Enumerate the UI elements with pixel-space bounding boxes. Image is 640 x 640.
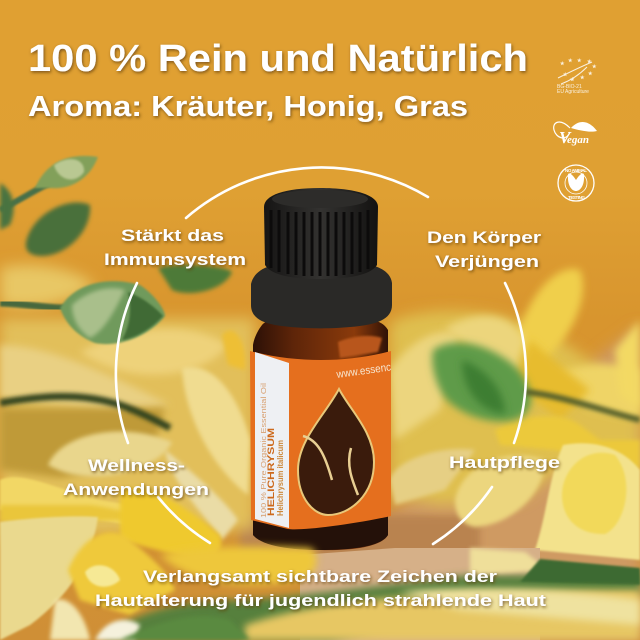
bottom caption: Hautalterung für jugendlich strahlende Haut [95, 591, 546, 610]
icon: EU organic leaf badge: ★ [577, 58, 582, 64]
benefit label: wellness: Anwendungen [63, 480, 209, 499]
title: 100 % Rein und Natürlich [28, 38, 528, 80]
benefit label: wellness [63, 456, 209, 499]
bottle: amber highlight [338, 336, 382, 358]
benefit label: immune system: Immunsystem [104, 250, 246, 269]
bottle: white side panel of label: Helichrysum italicum [276, 440, 285, 516]
icon: vegan leaf badge [554, 122, 597, 147]
icon: no animal testing badge: TESTING [568, 195, 585, 200]
icon: no animal testing badge: NO ANIMAL [565, 168, 587, 173]
large green bud: left [0, 281, 165, 344]
petals on the right [390, 269, 640, 560]
bottle: white side panel of label [255, 352, 289, 528]
green bud: right [432, 343, 640, 421]
icon: EU organic leaf badge: ★ [592, 64, 597, 70]
benefit label: rejuvenate [427, 228, 541, 271]
blurred bud behind label text [158, 265, 232, 293]
benefit label: skin care: Hautpflege [449, 453, 560, 472]
title [28, 38, 528, 123]
icon: vegan leaf badge: V [559, 128, 572, 147]
subtitle: aroma: Aroma: Kräuter, Honig, Gras [28, 91, 468, 123]
wooden table surface [240, 325, 640, 640]
icon: drop emblem on label [298, 389, 374, 515]
bottle: ribbed screw cap [264, 188, 378, 279]
icon: EU organic leaf badge: EU Agriculture [557, 89, 589, 95]
wood table foreground edge [300, 548, 540, 640]
bottle: white side panel of label: 100 % Pure Organic Essential Oil [261, 382, 268, 518]
bottom caption [95, 567, 546, 610]
icon: no animal testing badge [558, 165, 594, 201]
icon: EU organic leaf badge: ★ [588, 71, 593, 77]
bottle: white side panel of label: HELICHRYSUM [266, 428, 277, 516]
icon: EU organic leaf badge: ★ [568, 58, 573, 64]
icon: vegan leaf badge: egan [567, 134, 589, 146]
icon: EU organic leaf badge: BG-BIO-21 [557, 84, 582, 90]
dark stem across the left petals [0, 396, 170, 428]
bottle: label website text: www.essenc [335, 361, 392, 381]
bottom caption: Verlangsamt sichtbare Zeichen der [143, 567, 497, 586]
icon: EU organic leaf badge: ★ [560, 61, 565, 67]
circular arc segments around the bottle [116, 167, 526, 544]
blurred petals behind the bottle: left mass [0, 265, 255, 540]
benefit label: rejuvenate: Den Körper [427, 228, 541, 247]
icon: EU organic leaf badge: ★ [580, 75, 585, 81]
icon: EU organic leaf badge: ★ [563, 72, 568, 78]
benefit label: immune system [104, 226, 246, 269]
benefit label: immune system: Stärkt das [121, 226, 224, 245]
icon: EU organic leaf badge [557, 58, 597, 95]
foreground green stems and blurred petals [95, 548, 640, 640]
icon: EU organic leaf badge: ★ [570, 77, 575, 83]
benefit label: rejuvenate: Verjüngen [435, 252, 539, 271]
bottle: amber glass body [253, 318, 388, 550]
yellow petals in the foreground [0, 477, 317, 640]
glass dropper bottle [250, 188, 392, 550]
benefit label: wellness: Wellness- [88, 456, 185, 475]
bottle: orange label [250, 351, 391, 529]
sprig of buds: upper left [0, 156, 98, 256]
bottle: dark base [253, 510, 388, 550]
icon: EU organic leaf badge: ★ [587, 59, 592, 65]
bottle: black reducer ring [251, 262, 392, 328]
